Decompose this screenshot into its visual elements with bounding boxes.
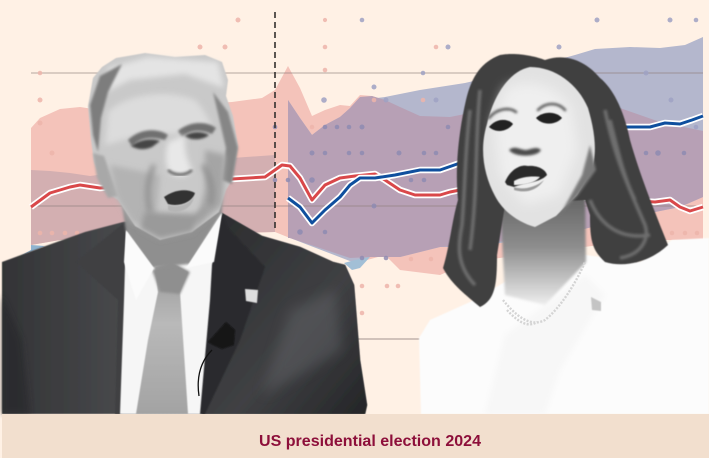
nostril shadow — [168, 170, 192, 174]
nose — [509, 148, 541, 156]
head base — [88, 53, 238, 240]
microphone — [198, 322, 235, 396]
forehead — [105, 94, 212, 145]
poll dots: blue — [321, 18, 698, 129]
chart: poll bands, lines and dots — [20, 12, 703, 339]
eyes — [131, 132, 209, 149]
left lapel — [76, 222, 128, 414]
teeth — [514, 176, 540, 185]
blue sliver at lower left — [20, 245, 45, 256]
poll dots: purple inside overlap — [273, 124, 686, 260]
suit jacket — [2, 213, 367, 414]
white jacket — [419, 238, 709, 414]
red polling range band — [31, 66, 703, 275]
brow shading — [128, 123, 216, 146]
shirt collar — [124, 213, 222, 300]
poll dots: red — [38, 18, 699, 315]
smile lines — [148, 165, 212, 212]
flag pin — [591, 297, 601, 311]
neck — [122, 190, 222, 268]
mouth — [164, 190, 195, 205]
eyes — [489, 113, 562, 131]
ear — [93, 153, 118, 198]
shirt — [120, 213, 222, 414]
caption background — [2, 414, 709, 458]
lapel flag pin — [245, 289, 258, 303]
cheek shading — [110, 165, 160, 230]
tie — [136, 263, 188, 414]
suit right panel — [200, 213, 367, 414]
overlap of the ranges, left of the dashed line — [31, 155, 275, 245]
dashed event marker — [274, 12, 276, 232]
photo: Donald Trump — [2, 53, 367, 414]
photo: Kamala Harris — [419, 54, 709, 414]
hair highlights — [459, 90, 650, 285]
caption title: US presidential election 2024 — [259, 433, 481, 450]
brows — [489, 104, 565, 118]
blue polling range band — [288, 37, 703, 263]
nose highlight — [166, 135, 192, 176]
gridlines — [31, 73, 703, 339]
right lapel — [200, 213, 265, 414]
lower lip — [168, 197, 194, 212]
right jaw shadow — [560, 145, 596, 215]
Harris polling line — [288, 116, 703, 223]
caption bar — [2, 414, 709, 458]
necklace — [503, 262, 585, 324]
face — [483, 67, 595, 227]
face highlight — [494, 83, 578, 205]
jacket sheen — [262, 290, 342, 395]
lower lip shadow — [514, 180, 544, 191]
neck and chest — [500, 190, 586, 305]
hair highlight — [106, 57, 224, 92]
Trump polling line — [31, 165, 703, 211]
right temple hair — [213, 92, 238, 184]
jacket lapel shading — [485, 275, 605, 414]
left sleeve shading — [2, 295, 30, 414]
lips — [505, 166, 547, 187]
hair mass — [443, 54, 668, 307]
right cheek shading — [195, 150, 226, 228]
beard shadow — [140, 205, 208, 239]
blue sliver at lower centre — [344, 257, 370, 270]
hair shadow — [90, 64, 122, 152]
tie knot — [152, 262, 190, 294]
overlap of the ranges, right of the dashed line — [288, 96, 703, 258]
